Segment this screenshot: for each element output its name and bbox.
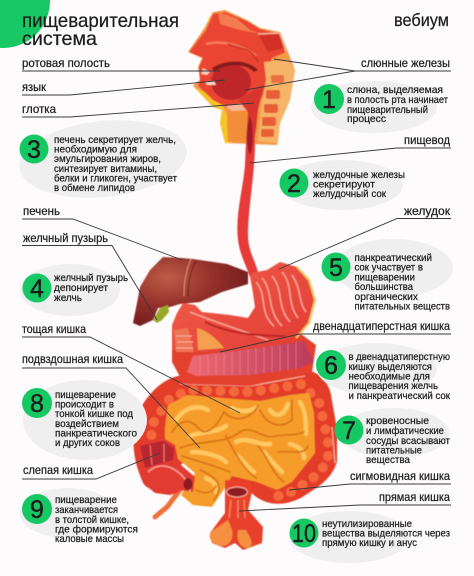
panel: note 2: 2 (287, 170, 301, 198)
panel: note 7: вещества (366, 455, 410, 466)
label: слюнные железы (245, 56, 451, 90)
caecum and appendix (137, 438, 195, 517)
label: желчный пузырь (22, 231, 157, 320)
panel: note 6: пищеварения желчь (348, 381, 438, 392)
panel: note 10: вещества выделяются через (322, 528, 450, 540)
stomach and duodenum (172, 262, 315, 352)
esophagus (237, 115, 258, 277)
label: прямая кишка: прямая кишка (379, 490, 450, 504)
brand: вебиум: вебиум (394, 10, 449, 30)
panel: note 9: заканчивается (55, 505, 118, 516)
panel: note 1 (311, 81, 448, 133)
panel: note 6: в двенадцатиперстную (348, 352, 450, 363)
panel: note 9: в толстой кишке, (55, 515, 129, 526)
label: сигмовидная кишка (289, 469, 451, 490)
panel: note 5: органических (354, 292, 418, 303)
panel: note 4: 4 (30, 275, 44, 303)
panel: note 10 (289, 511, 450, 563)
panel: note 7: и лимфатические (366, 425, 444, 437)
panel: note 8: 8 (30, 390, 44, 418)
panel: note 8: происходит в (55, 400, 114, 410)
panel: note 5: большинства (354, 281, 413, 293)
panel: note 6: кишку выделяются (348, 362, 432, 373)
large intestine (144, 376, 335, 497)
title: система (22, 28, 97, 50)
label: двенадцатиперстная кишка (220, 319, 451, 352)
panel: note 10: прямую кишку и анус (322, 538, 417, 549)
panel: note 5: пищеварении (354, 272, 415, 283)
panel: note 1: в полость рта начинает (347, 95, 448, 106)
panel: note 8: и других соков (55, 438, 120, 449)
panel: note 8: панкреатического (55, 428, 137, 440)
panel: note 4: желчь (54, 293, 82, 304)
anatomy illustration (133, 10, 335, 550)
title: пищеварительная (22, 10, 179, 32)
label: двенадцатиперстная кишка: двенадцатиперстная кишка (313, 319, 450, 333)
panel: note 5: панкреатический (354, 253, 432, 264)
panel: note 8: воздействием (55, 419, 119, 430)
label: прямая кишка (239, 490, 451, 511)
label: желчный пузырь: желчный пузырь (23, 231, 108, 245)
panel: note 9: где формируются (55, 524, 138, 536)
label: печень (22, 204, 182, 260)
gallbladder (153, 305, 169, 323)
panel: note 4 (20, 264, 128, 316)
panel: note 8: тонкой кишке под (55, 409, 133, 420)
esophagus dark lumen (247, 116, 253, 155)
label: пищевод: пищевод (404, 133, 450, 147)
panel: note 3: эмульгирования жиров, (54, 154, 161, 165)
panel: note 7: 7 (342, 417, 356, 445)
label: желудок: желудок (404, 204, 451, 218)
panel: note 6 (316, 343, 451, 402)
panel: note 1: слюна, выделяемая (347, 85, 443, 96)
panel: note 1: 1 (322, 86, 336, 114)
small intestine (165, 393, 315, 507)
panel: note 4: желчный пузырь (54, 273, 128, 284)
green corner circle (0, 0, 50, 48)
panel: note 4: депонирует (54, 283, 108, 294)
panel: note 10: 10 (292, 520, 316, 548)
panel: note 5 (322, 239, 453, 312)
panel: note 2: секретируют (313, 180, 375, 190)
panel: note 8 (22, 380, 147, 460)
panel: note 9: каловые массы (55, 534, 124, 545)
panel: note 6: 6 (324, 352, 338, 380)
panel: note 3: печень секретирует желчь, (54, 135, 176, 146)
panel: note 7: кровеносные (366, 416, 429, 427)
label: язык: язык (22, 80, 47, 94)
label: подвздошная кишка (22, 352, 200, 448)
panel: note 2: желудочные железы (313, 170, 405, 181)
panel: note 5: 5 (329, 254, 343, 282)
panel: note 3: белки и гликоген, участвует (54, 172, 177, 184)
panel: note 5: сок участвует в (354, 263, 423, 274)
panel: note 2 (279, 160, 405, 210)
panel: note 7: питательные (366, 446, 422, 456)
liver (133, 257, 248, 326)
stomach base under-layer (172, 325, 316, 386)
panel: note 3: синтезирует витамины, (54, 164, 157, 175)
label: тощая кишка: тощая кишка (22, 322, 86, 336)
label: язык (22, 80, 225, 95)
label: подвздошная кишка: подвздошная кишка (22, 352, 123, 366)
panel: note 6: необходимые для (348, 370, 430, 382)
panel: note 1: процесс (347, 114, 386, 125)
label: ротовая полость: ротовая полость (22, 56, 110, 70)
label: тощая кишка (22, 322, 240, 413)
title (22, 10, 179, 50)
label: слепая кишка (22, 453, 160, 479)
panel: note 5: питательных веществ (354, 302, 450, 312)
head section (188, 10, 295, 145)
label: слепая кишка: слепая кишка (23, 463, 93, 477)
panel: note 7 (334, 408, 450, 466)
panel: note 8: пищеварение (55, 390, 116, 401)
panel: note 9 (20, 488, 138, 545)
panel: note 10: неутилизированные (322, 519, 412, 530)
label: желудок (279, 204, 451, 269)
label: слюнные железы: слюнные железы (361, 56, 450, 70)
panel: note 1: пищеварительный (347, 105, 428, 116)
label: сигмовидная кишка: сигмовидная кишка (350, 469, 450, 483)
panel: note 7: сосуды всасывают (366, 436, 450, 447)
label: глотка: глотка (22, 102, 56, 116)
transverse colon band (187, 341, 314, 376)
rectum and anus (210, 480, 263, 550)
panel: note 2: желудочный сок (313, 189, 387, 200)
label: пищевод (250, 133, 451, 163)
panel: note 3: 3 (27, 136, 41, 164)
label: глотка (22, 102, 254, 117)
label: печень: печень (23, 204, 60, 218)
panel: note 9: 9 (30, 496, 44, 524)
panel: note 3: в обмене липидов (54, 182, 135, 194)
panel: note 3 (15, 112, 191, 206)
panel: note 3: необходимую для (54, 144, 137, 156)
panel: note 6: и панкреатический сок (348, 391, 451, 402)
panel: note 9: пищеварение (55, 495, 117, 506)
